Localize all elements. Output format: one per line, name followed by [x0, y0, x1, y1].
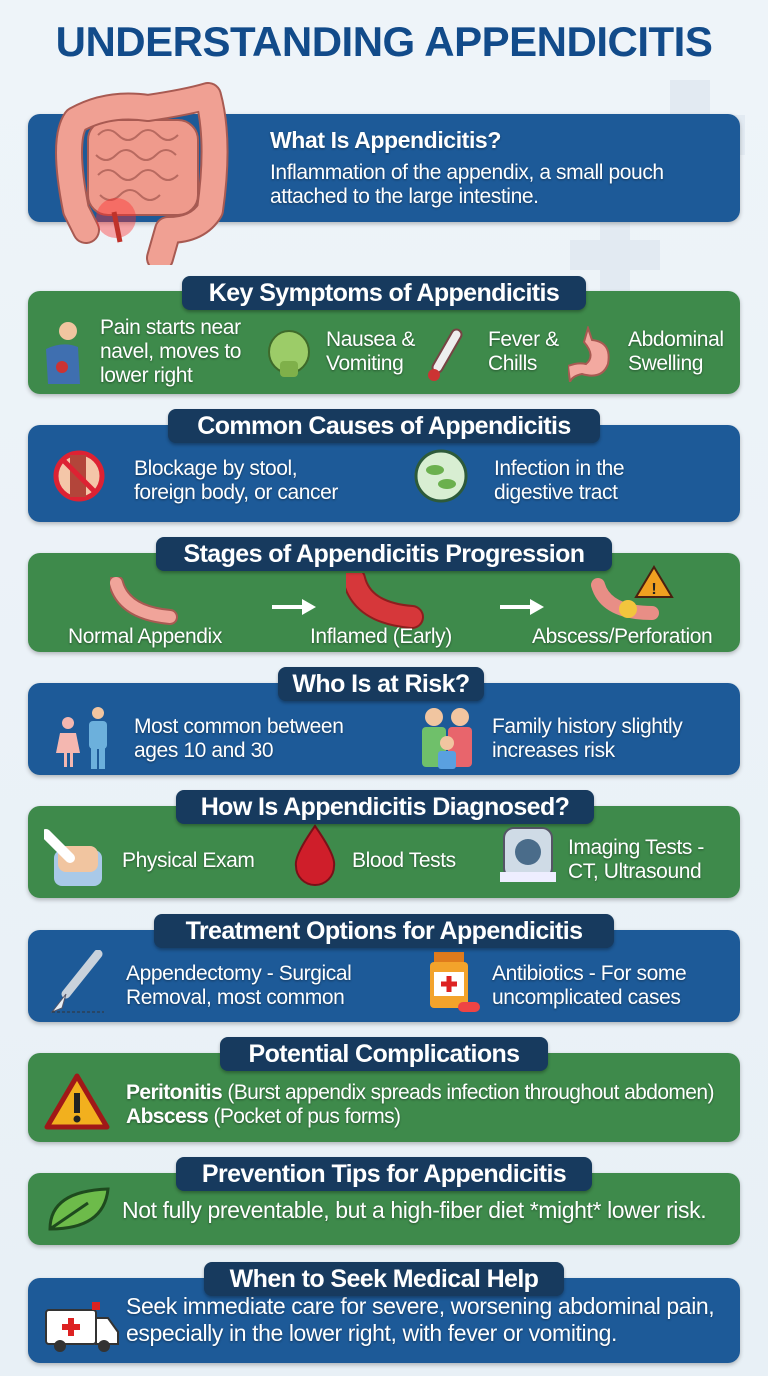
text block — [270, 161, 664, 210]
panel: treatment — [28, 930, 740, 1022]
text: Removal, most common — [126, 986, 344, 1009]
text — [126, 962, 352, 1009]
text: fever: Fever & — [488, 328, 559, 351]
icon: physical exam — [44, 829, 102, 886]
text: infection: Infection in the — [494, 457, 624, 480]
heading: risk: Who Is at Risk? — [292, 670, 470, 698]
text: uncomplicated cases — [492, 986, 681, 1009]
icon: abdominal pain person — [46, 322, 80, 384]
text: increases risk — [492, 739, 615, 762]
text: Physical Exam — [122, 849, 255, 872]
icon: blockage — [54, 450, 104, 502]
text: Not fully preventable, but a high-fiber diet *might* lower risk. — [122, 1197, 706, 1223]
icon: family — [422, 708, 472, 769]
icon: CT scanner — [500, 827, 556, 882]
panel: diagnosis — [28, 806, 740, 898]
text: Seek immediate care for severe, worsening abdominal pain, — [126, 1293, 714, 1319]
text — [134, 715, 344, 764]
text: nausea: Vomiting — [326, 352, 403, 375]
text: Antibiotics - For some — [492, 962, 686, 985]
panel: stages — [28, 553, 740, 652]
arrow — [500, 599, 544, 615]
text — [492, 962, 687, 1010]
text — [492, 715, 684, 762]
text: swelling — [628, 328, 724, 376]
text: Blood Tests — [352, 849, 456, 872]
text: pain: Pain starts near — [100, 316, 241, 339]
heading: prevention: Prevention Tips for Appendicitis — [202, 1160, 566, 1188]
icon: inflamed appendix — [346, 573, 424, 629]
icon: normal appendix — [110, 577, 178, 625]
icon: ambulance — [45, 1302, 119, 1352]
icon: intestine — [55, 82, 228, 265]
icon: stomach — [568, 326, 610, 382]
heading: seek help: When to Seek Medical Help — [230, 1265, 538, 1293]
text: pain: lower right — [100, 364, 192, 387]
icon: warning — [44, 1074, 110, 1130]
panel: causes — [28, 425, 740, 522]
labels: Normal Appendix — [68, 625, 222, 648]
heading: complications: Potential Complications — [249, 1040, 519, 1068]
text: ages 10 and 30 — [134, 739, 273, 762]
icon: leaf — [48, 1188, 110, 1230]
text: blockage: foreign body, or cancer — [134, 481, 338, 504]
panel: seek help — [28, 1278, 740, 1363]
text — [568, 836, 704, 883]
heading: causes: Common Causes of Appendicitis — [197, 412, 571, 440]
text: Appendectomy - Surgical — [126, 962, 351, 985]
text: Peritonitis (Burst appendix spreads infection throughout abdomen) — [126, 1081, 714, 1104]
text: infection: digestive tract — [494, 481, 618, 504]
text — [126, 1293, 714, 1348]
arrow — [272, 599, 316, 615]
text — [126, 1081, 714, 1130]
text block: attached to the large intestine. — [270, 185, 539, 208]
text: nausea: Nausea & — [326, 328, 415, 351]
text: pain — [100, 316, 242, 388]
text: Most common between — [134, 715, 344, 738]
text: swelling: Abdominal — [628, 328, 724, 351]
text: pain: navel, moves to — [100, 340, 241, 363]
icon: thermometer — [428, 328, 462, 381]
text: especially in the lower right, with fever or vomiting. — [126, 1320, 617, 1346]
heading: complications — [220, 1037, 548, 1071]
text: fever: Chills — [488, 352, 537, 375]
icon: nausea — [268, 330, 310, 377]
icon: perforation — [591, 565, 674, 620]
icon: two people — [56, 707, 107, 769]
panel: prevention — [28, 1173, 740, 1245]
text: Family history slightly — [492, 715, 682, 738]
text block: Inflammation of the appendix, a small pouch — [270, 161, 664, 184]
text: fever — [488, 328, 560, 375]
icon: bacteria — [414, 450, 468, 502]
icon: perforation: ! — [651, 581, 657, 598]
heading: treatment: Treatment Options for Appendicitis — [186, 917, 582, 945]
icon: pill bottle — [430, 952, 480, 1012]
text: blockage — [134, 457, 339, 506]
text: blockage: Blockage by stool, — [134, 457, 297, 480]
panel: what is appendicitis — [28, 114, 740, 222]
background crosses — [570, 80, 745, 291]
icon: blood drop — [294, 824, 336, 886]
panel: stages: Inflamed (Early) — [310, 625, 452, 648]
heading: key symptoms: Key Symptoms of Appendicitis — [209, 279, 559, 307]
text: nausea — [326, 328, 416, 376]
text: CT, Ultrasound — [568, 860, 701, 883]
heading: What Is Appendicitis? — [270, 127, 501, 153]
text: infection — [494, 457, 624, 506]
heading: stages: Stages of Appendicitis Progression — [184, 540, 584, 568]
heading: diagnosis: How Is Appendicitis Diagnosed? — [201, 793, 569, 821]
icon: scalpel — [50, 950, 104, 1013]
text: Imaging Tests - — [568, 836, 704, 859]
text: swelling: Swelling — [628, 352, 703, 375]
panel: stages: Abscess/Perforation — [532, 625, 712, 648]
panel: complications — [28, 1053, 740, 1142]
panel: key symptoms — [28, 291, 740, 394]
title: UNDERSTANDING APPENDICITIS — [56, 18, 712, 65]
panel: risk — [28, 683, 740, 775]
text: Abscess (Pocket of pus forms) — [126, 1105, 400, 1128]
